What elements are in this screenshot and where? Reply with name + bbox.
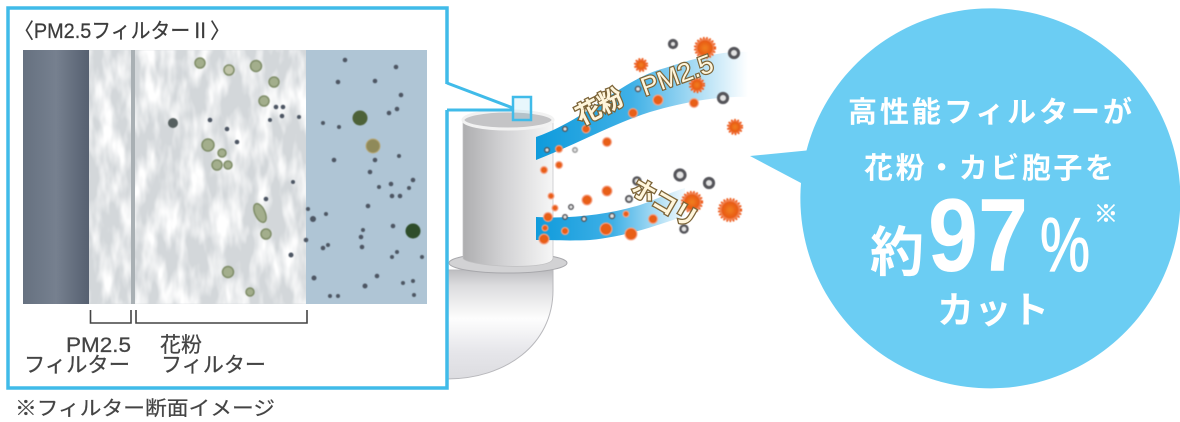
flange	[449, 253, 567, 273]
label: PM2.5: PM2.5	[637, 48, 717, 102]
bubble figure: about 97 percent	[870, 178, 1118, 294]
panel heading: 〈PM2.5フィルターⅡ〉	[14, 20, 230, 43]
panel background and frame	[8, 8, 447, 388]
label: PM2.5 filter: フィルター	[24, 354, 130, 377]
bracket: PM2.5 filter	[90, 310, 131, 323]
upper airflow band	[536, 52, 748, 160]
spiky pollen particles	[635, 38, 742, 221]
bubble line 2: 花粉・カビ胞子を	[864, 152, 1114, 185]
label: PM2.5 filter: PM2.5	[66, 334, 131, 357]
magnified area marker	[513, 97, 531, 120]
bubble figure: about 97 percent: ※	[1094, 201, 1118, 228]
label: pollen filter: フィルター	[161, 354, 266, 377]
label: pollen filter	[160, 334, 266, 377]
label: dust: ホコリ	[626, 174, 702, 234]
grey dust particles	[545, 40, 738, 232]
elbow pipe	[440, 270, 553, 379]
bubble line 4: カット	[937, 290, 1049, 331]
cylinder	[463, 118, 553, 266]
bubble figure: about 97 percent: %	[1040, 203, 1090, 288]
large particles caught in the filter	[168, 58, 424, 298]
bubble line 1: 高性能フィルターが	[848, 95, 1132, 129]
label: PM2.5 filter	[24, 334, 131, 377]
callout lines from pipe to panel	[447, 83, 513, 110]
bubble figure: about 97 percent: 97	[928, 178, 1028, 294]
small orange particles	[539, 95, 698, 244]
bubble figure: about 97 percent: 約	[870, 223, 924, 283]
bubble shape	[750, 8, 1180, 388]
small dark particles	[208, 58, 424, 298]
footnote: ※フィルター断面イメージ	[15, 397, 275, 420]
airflow particles	[539, 38, 742, 244]
cylinder opening	[463, 111, 553, 129]
bracket: pollen filter	[136, 310, 307, 323]
panel: filter cross-section	[8, 8, 447, 388]
filter microscope photo	[23, 50, 427, 304]
lower airflow band	[536, 188, 685, 240]
label: pollen filter: 花粉	[160, 334, 202, 357]
pipe illustration	[440, 111, 567, 379]
label: pollen: 花粉	[571, 83, 629, 131]
speech bubble	[750, 8, 1180, 388]
